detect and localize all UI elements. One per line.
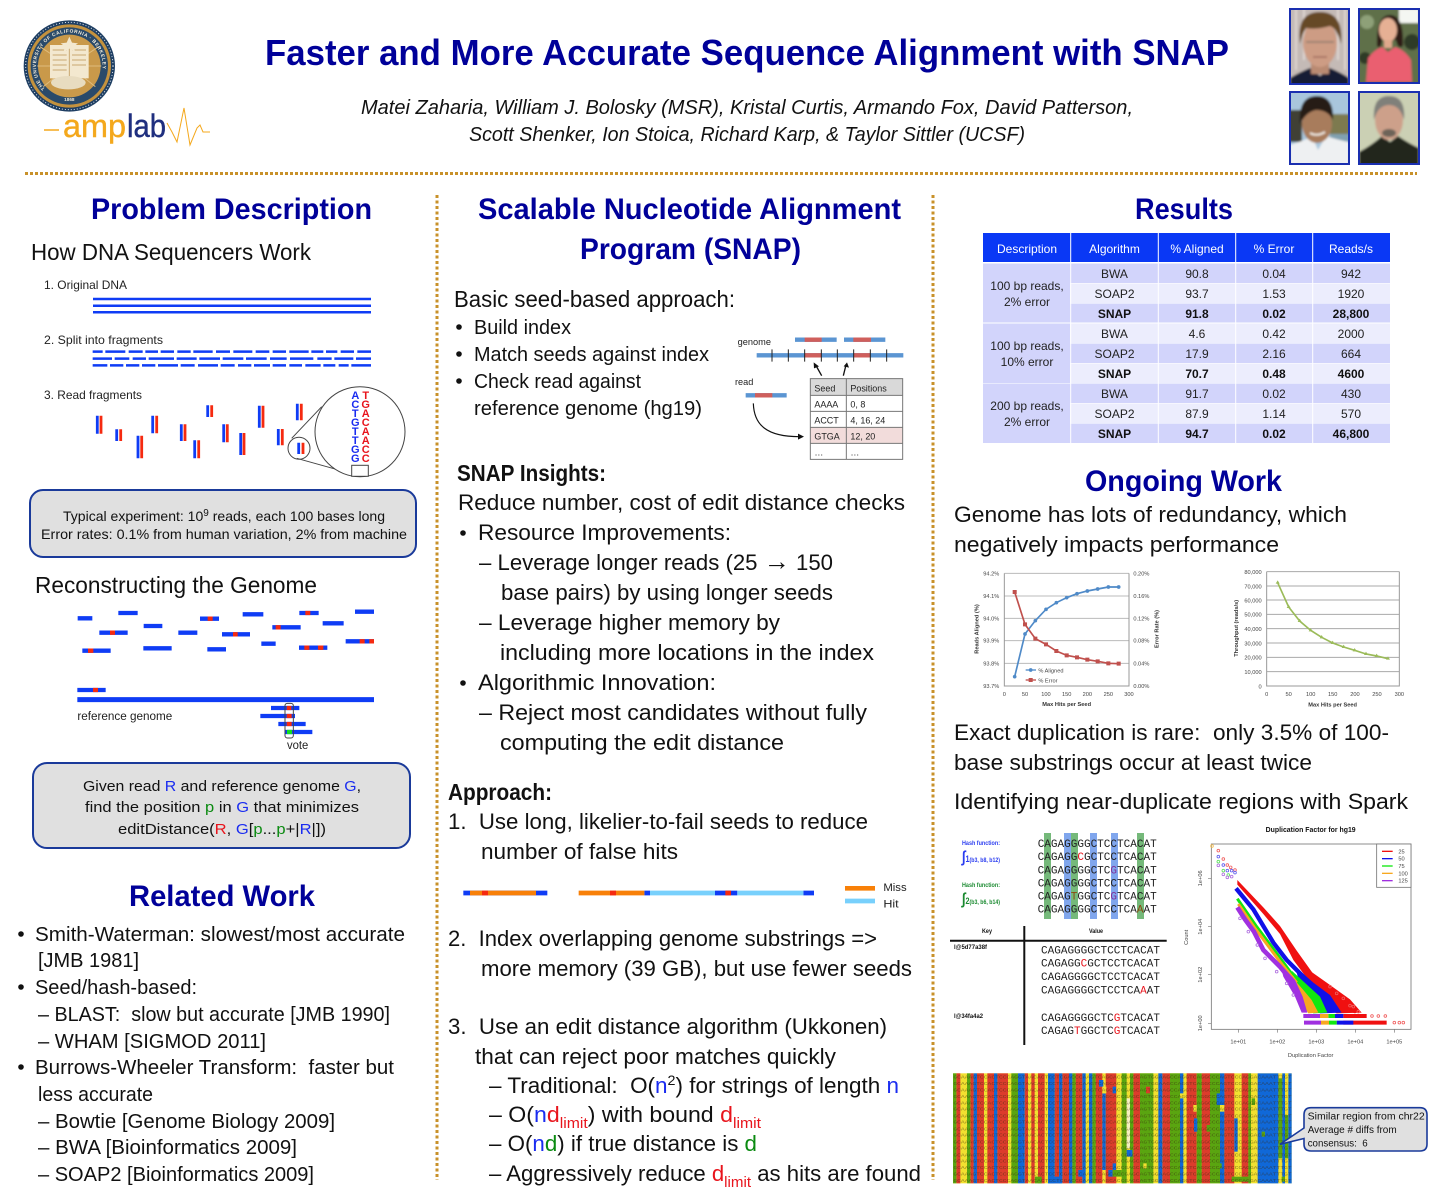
list: related work: – Bowtie [Genome Biology 2009] bbox=[38, 1111, 335, 1133]
legend: duplication factor: 100 bbox=[1398, 871, 1408, 877]
table: key value index: CAGAGTGGCTCGTCACAT bbox=[1041, 1026, 1160, 1038]
diagram: seed index lookup: read bbox=[735, 377, 753, 387]
list: related work: [JMB 1981] bbox=[38, 950, 139, 972]
text: approach step 2: 2. Index overlapping genome substrings => bbox=[448, 926, 877, 951]
chart: throughput vs max hits per seed: 80,000 bbox=[1244, 570, 1262, 576]
table: seed positions: ACCT bbox=[814, 416, 839, 426]
chart: reads aligned and error rate vs max hits per seed: 94.0% bbox=[983, 616, 999, 622]
table: key value index: CAGAGGGGCTCGTCACAT bbox=[1041, 1013, 1160, 1025]
chart: reads aligned and error rate vs max hits per seed: 0.00% bbox=[1133, 684, 1149, 690]
text: redundancy: negatively impacts performance bbox=[954, 532, 1279, 557]
chart: throughput vs max hits per seed: 20,000 bbox=[1244, 656, 1262, 662]
chart: throughput vs max hits per seed: 40,000 bbox=[1244, 627, 1262, 633]
chart: reads aligned and error rate vs max hits per seed: 0 bbox=[1003, 692, 1006, 698]
sequence letters: GCAAAGTCCACTCCCAGGTAACACTCCTCGACCCAAGTCAGCACCGAGCAGTGGAAGCCAGGTCAGGCCCAGTCCCAGGACAAATTTGT bbox=[953, 1120, 1292, 1126]
heading: ongoing work: Ongoing Work bbox=[1085, 465, 1282, 498]
sequence letters: GCAAAGTCCACTCCCAGGTAACACTCCTCGACCCAAGTCAGCACCGAGCAGTGGAAGCCAGGTCAGGCCCAGTCCCAGGACAAATTTGT bbox=[953, 1107, 1292, 1113]
sequence letters: GCAAAGTCCACTCCCAGGTAACACTCCTCGACCCAAGTCAGCACCGAGCAGTGGAAGCCAGGTCAGGCCCAGTCCCAGGACAAATTTGT bbox=[953, 1087, 1292, 1093]
table: results: BWA bbox=[1101, 267, 1128, 281]
text: near-duplicate regions: Identifying near-duplicate regions with Spark bbox=[954, 789, 1409, 814]
sequence letters: GCAAAGTCCACTCCCAGGTAACACTCCTCGACCCAAGTCAGCACCGAGCAGTGGAAGCCAGGTCAGGCCCAGTCCCAGGACAAATTTGT bbox=[953, 1081, 1292, 1087]
diagram: hash functions over aligned sequences: ∫2(b3, b6, b14) bbox=[960, 891, 1000, 908]
text: approach step 3: 3. Use an edit distance algorithm (Ukkonen) bbox=[448, 1014, 887, 1039]
table: results: 942 bbox=[1341, 267, 1361, 281]
text: SNAP insights: including more locations in the index bbox=[500, 640, 874, 665]
text: SNAP insights: Resource Improvements: bbox=[478, 520, 731, 545]
sequence letters: GCAAAGTCCACTCCCAGGTAACACTCCTCGACCCAAGTCAGCACCGAGCAGTGGAAGCCAGGTCAGGCCCAGTCCCAGGACAAATTTGT bbox=[953, 1113, 1292, 1119]
sequence letters: GCAAAGTCCACTCCCAGGTAACACTCCTCGACCCAAGTCAGCACCGAGCAGTGGAAGCCAGGTCAGGCCCAGTCCCAGGACAAATTTGT bbox=[953, 1074, 1292, 1080]
chart: throughput vs max hits per seed: 250 bbox=[1372, 692, 1382, 698]
chart: throughput vs max hits per seed: 150 bbox=[1328, 692, 1337, 698]
panel: problem description bbox=[30, 193, 416, 848]
callout: typical experiment: 9 bbox=[203, 508, 209, 519]
chart: reads aligned and error rate vs max hits per seed: 0.12% bbox=[1133, 616, 1149, 622]
table: results: 664 bbox=[1341, 347, 1361, 361]
text: approach step 3: – Traditional: O(n bbox=[489, 1073, 667, 1098]
table: results: 90.8 bbox=[1185, 267, 1209, 281]
table: results: 4600 bbox=[1338, 367, 1365, 381]
table: results: Description bbox=[997, 242, 1057, 256]
text: SNAP insights: – Leverage higher memory by bbox=[479, 610, 780, 635]
diagram: hash functions over aligned sequences: CAGAGGGGCTCCTCACAT bbox=[1038, 878, 1157, 890]
diagram: hash functions over aligned sequences: CAGAGGGGCTCGTCACAT bbox=[1038, 865, 1157, 877]
chart: duplication factor for hg19: 1e+06 bbox=[1198, 870, 1204, 886]
callout: similar region from chr22 bbox=[1280, 1108, 1427, 1151]
diagram: hash functions over aligned sequences: CAGAGGGGCTCCTCAAAT bbox=[1038, 905, 1157, 917]
chart: reads aligned and error rate vs max hits per seed: 94.1% bbox=[983, 594, 999, 600]
heading: scalable nucleotide alignment program: Scalable Nucleotide Alignment bbox=[478, 193, 901, 226]
text: redundancy: Genome has lots of redundancy, which bbox=[954, 502, 1347, 527]
sequence letters bbox=[953, 1074, 1292, 1184]
chart: reads aligned and error rate vs max hits per seed: 100 bbox=[1041, 692, 1051, 698]
chart: throughput vs max hits per seed: 10,000 bbox=[1244, 670, 1262, 676]
zoom circle with base letters: G bbox=[351, 417, 360, 429]
heading: related work: Related Work bbox=[129, 880, 315, 913]
table: results: 570 bbox=[1341, 407, 1361, 421]
chart: reads aligned and error rate vs max hits per seed: % Aligned bbox=[1038, 668, 1064, 674]
panel: ongoing work bbox=[950, 465, 1427, 1184]
text: SNAP insights: SNAP Insights: bbox=[457, 460, 606, 486]
chart: duplication factor for hg19: 1e+04 bbox=[1198, 919, 1204, 935]
chart: reads aligned and error rate vs max hits per seed: Max Hits per Seed bbox=[1042, 702, 1092, 708]
table: key value index: l@5d77a38f bbox=[954, 945, 988, 951]
chart: throughput vs max hits per seed: 70,000 bbox=[1244, 584, 1262, 590]
table: results: % Aligned bbox=[1170, 242, 1224, 256]
text: approach step 3: n bbox=[886, 1073, 899, 1098]
text: approach step 1: number of false hits bbox=[481, 839, 678, 864]
text: approach step 1: 1. Use long, likelier-to-fail seeds to reduce bbox=[448, 809, 868, 834]
diagram: seed miss and hit bars bbox=[463, 882, 907, 911]
chart: duplication factor for hg19: 1e+02 bbox=[1198, 967, 1204, 983]
diagram: genome reconstruction reads bbox=[77, 612, 374, 752]
text: approach step 3: ) with bound bbox=[588, 1102, 720, 1127]
diagram: hash functions over aligned sequences: Hash function: bbox=[962, 882, 1000, 889]
chart: throughput vs max hits per seed: 200 bbox=[1350, 692, 1360, 698]
sequence letters: GCAAAGTCCACTCCCAGGTAACACTCCTCGACCCAAGTCAGCACCGAGCAGTGGAAGCCAGGTCAGGCCCAGTCCCAGGACAAATTTGT bbox=[953, 1159, 1292, 1165]
text: approach step 3: – O(nd) if true distance is d bbox=[489, 1131, 757, 1156]
sequence letters: GCAAAGTCCACTCCCAGGTAACACTCCTCGACCCAAGTCAGCACCGAGCAGTGGAAGCCAGGTCAGGCCCAGTCCCAGGACAAATTTGT bbox=[953, 1146, 1292, 1152]
table: results: 200 bp reads, bbox=[990, 399, 1064, 413]
text: approach step 3: 2 bbox=[668, 1072, 676, 1088]
table: results: % Error bbox=[1254, 242, 1294, 256]
chart: duplication factor for hg19: 1e+03 bbox=[1308, 1039, 1324, 1045]
table: seed positions: Positions bbox=[850, 384, 887, 394]
legend: duplication factor: 75 bbox=[1398, 864, 1405, 870]
table: results: BWA bbox=[1101, 327, 1128, 341]
table: results: 0.02 bbox=[1262, 307, 1286, 321]
table: results: 0.02 bbox=[1262, 387, 1286, 401]
zoom circle with base letters: A bbox=[362, 435, 370, 447]
sequence letters: GCAAAGTCCACTCCCAGGTAACACTCCTCGACCCAAGTCAGCACCGAGCAGTGGAAGCCAGGTCAGGCCCAGTCCCAGGACAAATTTGT bbox=[953, 1178, 1292, 1184]
zoom circle with base letters: C bbox=[351, 399, 359, 411]
zoom circle with base letters: C bbox=[362, 444, 370, 456]
text: approach step 3: limit bbox=[733, 1115, 762, 1132]
table: seed positions: … bbox=[850, 448, 859, 458]
chart: duplication factor for hg19: 1e+00 bbox=[1198, 1015, 1204, 1031]
text: exact duplication: Exact duplication is rare: only 3.5% of 100- bbox=[954, 720, 1389, 745]
table: results: 87.9 bbox=[1185, 407, 1209, 421]
zoom circle with base letters: T bbox=[352, 426, 359, 438]
label: reference genome: reference genome bbox=[77, 709, 173, 723]
text: SNAP insights bbox=[457, 460, 905, 755]
table: key value index: CAGAGGGGCTCCTCAAAT bbox=[1041, 985, 1160, 997]
table: key value index: CAGAGGGGCTCCTCACAT bbox=[1041, 972, 1160, 984]
table: results: SOAP2 bbox=[1094, 407, 1135, 421]
subheading: how DNA sequencers work: How DNA Sequencers Work bbox=[31, 239, 311, 265]
zoom circle with base letters: T bbox=[362, 390, 369, 402]
text: SNAP insights: – Leverage longer reads (25 → 150 bbox=[479, 546, 833, 576]
chart: reads aligned and error rate vs max hits per seed: 93.7% bbox=[983, 684, 999, 690]
zoom circle with base letters: A bbox=[351, 390, 359, 402]
table: results: 2% error bbox=[1004, 295, 1050, 309]
table: results: 100 bp reads, bbox=[990, 339, 1064, 353]
chart: duplication factor for hg19: 1e+02 bbox=[1269, 1039, 1285, 1045]
table: results: 1920 bbox=[1338, 287, 1365, 301]
zoom circle with base letters: A bbox=[362, 408, 370, 420]
text: basic seed-based approach: Match seeds against index bbox=[474, 344, 709, 366]
zoom circle with base letters: C bbox=[362, 417, 370, 429]
diagram: seed index lookup bbox=[735, 337, 903, 459]
panel: related work bbox=[18, 880, 405, 1186]
chart: throughput vs max hits per seed: 0 bbox=[1265, 692, 1268, 698]
list: related work: – WHAM [SIGMOD 2011] bbox=[38, 1031, 266, 1053]
logo: UC Berkeley seal: 1868 bbox=[64, 97, 75, 102]
chart: duplication factor for hg19: Count bbox=[1184, 929, 1190, 945]
chart: throughput vs max hits per seed: 50 bbox=[1286, 692, 1292, 698]
table: results: SNAP bbox=[1098, 307, 1131, 321]
text: basic seed-based approach: reference genome (hg19) bbox=[474, 398, 702, 420]
table: results: 46,800 bbox=[1333, 427, 1370, 441]
zoom circle with base letters: A bbox=[362, 426, 370, 438]
table: seed positions: AAAA bbox=[814, 400, 838, 410]
chart: throughput vs max hits per seed: 60,000 bbox=[1244, 598, 1262, 604]
sequence letters: GCAAAGTCCACTCCCAGGTAACACTCCTCGACCCAAGTCAGCACCGAGCAGTGGAAGCCAGGTCAGGCCCAGTCCCAGGACAAATTTGT bbox=[953, 1094, 1292, 1100]
table: seed positions: GTGA bbox=[814, 432, 840, 442]
callout: problem statement: editDistance( R, G[p...p+|R|]) bbox=[118, 821, 326, 838]
table: results: 0.02 bbox=[1262, 427, 1286, 441]
logo: UC Berkeley seal: THE UNIVERSITY OF CALIFORNIA · BERKELEY bbox=[32, 29, 106, 91]
table: seed positions: Seed bbox=[814, 384, 835, 394]
text: approach step 3: – O(nd bbox=[489, 1102, 559, 1127]
table: seed positions: … bbox=[814, 448, 823, 458]
text: approach step 1 bbox=[448, 779, 868, 864]
heading: scalable nucleotide alignment program: Program (SNAP) bbox=[580, 233, 801, 266]
panel: SNAP program bbox=[448, 193, 921, 1191]
list: related work: Smith-Waterman: slowest/most accurate bbox=[35, 924, 405, 946]
table: results: Algorithm bbox=[1089, 242, 1140, 256]
chart: reads aligned and error rate vs max hits per seed: 93.8% bbox=[983, 661, 999, 667]
step 3: read fragments bbox=[44, 387, 405, 477]
sequence letters: GCAAAGTCCACTCCCAGGTAACACTCCTCGACCCAAGTCAGCACCGAGCAGTGGAAGCCAGGTCAGGCCCAGTCCCAGGACAAATTTGT bbox=[953, 1165, 1292, 1171]
chart: duplication factor for hg19: Duplication Factor bbox=[1288, 1053, 1334, 1059]
chart: duplication factor for hg19: 1e+05 bbox=[1386, 1039, 1402, 1045]
chart: duplication factor for hg19: Duplication Factor for hg19 bbox=[1266, 827, 1356, 834]
table: results: Reads/s bbox=[1329, 242, 1373, 256]
chart: reads aligned and error rate vs max hits per seed bbox=[975, 571, 1161, 708]
chart: reads aligned and error rate vs max hits per seed: 0.20% bbox=[1133, 571, 1149, 577]
sequence letters: GCAAAGTCCACTCCCAGGTAACACTCCTCGACCCAAGTCAGCACCGAGCAGTGGAAGCCAGGTCAGGCCCAGTCCCAGGACAAATTTGT bbox=[953, 1126, 1292, 1132]
zoom circle with base letters: T bbox=[352, 435, 359, 447]
table: results: 70.7 bbox=[1185, 367, 1209, 381]
title: Faster and More Accurate Sequence Alignment with SNAP bbox=[265, 32, 1229, 73]
chart: throughput vs max hits per seed: Max Hits per Seed bbox=[1308, 703, 1358, 709]
table: key value index: CAGAGGGGCTCCTCACAT bbox=[1041, 945, 1160, 957]
text: SNAP insights: Algorithmic Innovation: bbox=[478, 670, 716, 695]
photo: author 4 bbox=[1357, 90, 1421, 166]
text: exact duplication bbox=[954, 720, 1389, 775]
table: results: 28,800 bbox=[1333, 307, 1370, 321]
step 3: read fragments: 3. Read fragments bbox=[44, 388, 142, 402]
chart: reads aligned and error rate vs max hits per seed: Reads Aligned (%) bbox=[975, 604, 981, 654]
chart: reads aligned and error rate vs max hits per seed: 0.16% bbox=[1133, 594, 1149, 600]
table: key value index bbox=[950, 926, 1167, 1045]
logo: amplab: amp bbox=[63, 108, 126, 144]
legend: hit: Hit bbox=[883, 899, 899, 911]
text: exact duplication: base substrings occur at least twice bbox=[954, 750, 1312, 775]
text: SNAP insights: computing the edit distance bbox=[500, 730, 784, 755]
text: approach step 3: limit bbox=[560, 1115, 589, 1132]
text: approach step 3: ) for strings of length bbox=[676, 1073, 886, 1098]
chart: throughput vs max hits per seed: 0 bbox=[1259, 684, 1262, 690]
chart: duplication factor for hg19: 1e+01 bbox=[1230, 1039, 1246, 1045]
table: results: 430 bbox=[1341, 387, 1361, 401]
chart: reads aligned and error rate vs max hits per seed: 0.08% bbox=[1133, 639, 1149, 645]
table: results: SOAP2 bbox=[1094, 287, 1135, 301]
table: key value index: Key bbox=[982, 929, 993, 935]
diagram: hash functions over aligned sequences: ∫1(b3, b8, b12) bbox=[960, 849, 1000, 866]
zoom circle with base letters: G bbox=[351, 444, 360, 456]
zoom circle with base letters bbox=[315, 387, 405, 477]
table: results: 10% error bbox=[1001, 355, 1053, 369]
list: related work: Burrows-Wheeler Transform: faster but bbox=[35, 1057, 394, 1079]
step 2: split into fragments: 2. Split into fragments bbox=[44, 333, 163, 347]
list: related work: – BWA [Bioinformatics 2009] bbox=[38, 1137, 297, 1159]
authors: Matei Zaharia, William J. Bolosky (MSR), Kristal Curtis, Armando Fox, David Patterson, bbox=[361, 97, 1133, 119]
list: related work bbox=[18, 924, 405, 1186]
heading: scalable nucleotide alignment program bbox=[478, 193, 901, 266]
chart: throughput vs max hits per seed: Throughput (reads/s) bbox=[1234, 600, 1240, 657]
table: results: 2000 bbox=[1338, 327, 1365, 341]
logo: amplab: lab bbox=[127, 108, 166, 144]
table: results: 1.53 bbox=[1262, 287, 1286, 301]
table: seed positions: 0, 8 bbox=[850, 400, 865, 410]
table: key value index: l@34fa4a2 bbox=[954, 1014, 984, 1020]
text: approach step 2 bbox=[448, 926, 912, 981]
table: results: 93.7 bbox=[1185, 287, 1209, 301]
table: results: 0.04 bbox=[1262, 267, 1286, 281]
callout: typical experiment bbox=[30, 490, 416, 557]
chart: throughput vs max hits per seed: 30,000 bbox=[1244, 641, 1262, 647]
legend: duplication factor: 125 bbox=[1398, 879, 1408, 885]
photo: author 1 bbox=[1288, 7, 1351, 86]
text: approach step 3: limit bbox=[724, 1174, 752, 1191]
table: results: SOAP2 bbox=[1094, 347, 1135, 361]
chart: reads aligned and error rate vs max hits per seed: Error Rate (%) bbox=[1155, 610, 1161, 648]
chart: reads aligned and error rate vs max hits per seed: 94.2% bbox=[983, 571, 999, 577]
legend: miss: Miss bbox=[883, 882, 907, 894]
table: results: 2% error bbox=[1004, 415, 1050, 429]
callout: problem statement: Given read R and reference genome G, bbox=[83, 778, 361, 795]
zoom circle with base letters: T bbox=[352, 408, 359, 420]
list: related work: Seed/hash-based: bbox=[35, 977, 197, 999]
legend: duplication factor: 25 bbox=[1398, 849, 1405, 855]
sequence letters: GCAAAGTCCACTCCCAGGTAACACTCCTCGACCCAAGTCAGCACCGAGCAGTGGAAGCCAGGTCAGGCCCAGTCCCAGGACAAATTTGT bbox=[953, 1139, 1292, 1145]
text: basic seed-based approach: Check read against bbox=[474, 371, 641, 393]
table: results: SNAP bbox=[1098, 367, 1131, 381]
chart: reads aligned and error rate vs max hits per seed: 250 bbox=[1104, 692, 1113, 698]
table: results: BWA bbox=[1101, 387, 1128, 401]
zoom circle with base letters: C bbox=[362, 453, 370, 465]
table: results: 2.16 bbox=[1262, 347, 1286, 361]
chart: reads aligned and error rate vs max hits per seed: 200 bbox=[1083, 692, 1092, 698]
callout: problem statement bbox=[33, 763, 410, 848]
table: results: 0.48 bbox=[1262, 367, 1286, 381]
table: results: 0.42 bbox=[1262, 327, 1286, 341]
text: SNAP insights: base pairs) by using longer seeds bbox=[501, 580, 833, 605]
text: basic seed-based approach bbox=[454, 286, 735, 420]
text: basic seed-based approach: Basic seed-based approach: bbox=[454, 286, 735, 312]
diagram: seed index lookup: genome bbox=[738, 337, 771, 347]
zoom circle with base letters: G bbox=[361, 399, 370, 411]
chart: reads aligned and error rate vs max hits per seed: 50 bbox=[1022, 692, 1028, 698]
table: key value index: CAGAGGCGCTCCTCACAT bbox=[1041, 959, 1160, 971]
authors bbox=[361, 97, 1133, 146]
callout: similar region from chr22: Similar region from chr22 bbox=[1308, 1112, 1425, 1122]
list: related work: – SOAP2 [Bioinformatics 2009] bbox=[38, 1164, 314, 1186]
diagram: hash functions over aligned sequences: CAGAGTGGCTCGTCACAT bbox=[1038, 892, 1157, 904]
table: results: SNAP bbox=[1098, 427, 1131, 441]
table: results: 1.14 bbox=[1262, 407, 1286, 421]
diagram: hash functions over aligned sequences: CAGAGGCGCTCCTCACAT bbox=[1038, 852, 1157, 864]
text: approach step 2: more memory (39 GB), but use fewer seeds bbox=[481, 956, 912, 981]
logo: UC Berkeley seal bbox=[24, 20, 115, 112]
chart: reads aligned and error rate vs max hits per seed: 150 bbox=[1062, 692, 1071, 698]
table: key value index: Value bbox=[1089, 929, 1104, 935]
table: results: 4.6 bbox=[1189, 327, 1206, 341]
chart: throughput vs max hits per seed: 50,000 bbox=[1244, 613, 1262, 619]
text: approach step 3 bbox=[448, 1014, 921, 1191]
chart: throughput vs max hits per seed: 100 bbox=[1306, 692, 1315, 698]
chart: duplication factor for hg19: 1e+04 bbox=[1347, 1039, 1363, 1045]
callout: typical experiment: Typical experiment: 10 bbox=[63, 508, 203, 524]
photo: author 2 bbox=[1357, 7, 1421, 85]
callout: problem statement: find the position p in G that minimizes bbox=[85, 799, 359, 816]
table: seed positions bbox=[810, 379, 903, 459]
chart: reads aligned and error rate vs max hits per seed: 300 bbox=[1124, 692, 1134, 698]
sequence letters: GCAAAGTCCACTCCCAGGTAACACTCCTCGACCCAAGTCAGCACCGAGCAGTGGAAGCCAGGTCAGGCCCAGTCCCAGGACAAATTTGT bbox=[953, 1172, 1292, 1178]
panel: results bbox=[983, 193, 1390, 443]
step 1: original DNA: 1. Original DNA bbox=[44, 278, 127, 292]
text: approach step 1: Approach: bbox=[448, 779, 552, 805]
diagram: hash functions over aligned sequences: CAGAGGGGCTCCTCACAT bbox=[1038, 839, 1157, 851]
callout: typical experiment: reads, each 100 bases long bbox=[209, 508, 385, 524]
text: approach step 3: d bbox=[720, 1102, 733, 1127]
text: basic seed-based approach: Build index bbox=[474, 317, 571, 339]
label: vote: vote bbox=[287, 738, 309, 752]
photo: author 3 bbox=[1288, 90, 1351, 166]
diagram: hash functions over aligned sequences bbox=[950, 833, 1167, 1045]
chart: reads aligned and error rate vs max hits per seed: 0.04% bbox=[1133, 661, 1149, 667]
heading: problem description: Problem Description bbox=[91, 193, 372, 226]
text: approach step 3: as hits are found bbox=[751, 1161, 921, 1186]
table: results: 94.7 bbox=[1185, 427, 1209, 441]
table: seed positions: 12, 20 bbox=[850, 432, 875, 442]
zoom circle with base letters: G bbox=[351, 453, 360, 465]
chart: reads aligned and error rate vs max hits per seed: % Error bbox=[1038, 678, 1058, 684]
table: results bbox=[983, 233, 1390, 443]
table: results: 17.9 bbox=[1185, 347, 1209, 361]
chart: reads aligned and error rate vs max hits per seed: 93.9% bbox=[983, 639, 999, 645]
list: related work: less accurate bbox=[38, 1084, 153, 1106]
callout: typical experiment: Error rates: 0.1% from human variation, 2% from machine bbox=[41, 526, 407, 542]
heading: results: Results bbox=[1135, 193, 1233, 226]
table: results: 91.8 bbox=[1185, 307, 1209, 321]
table: seed positions: 4, 16, 24 bbox=[850, 416, 885, 426]
step 1: original DNA bbox=[44, 278, 371, 312]
authors: Scott Shenker, Ion Stoica, Richard Karp, & Taylor Sittler (UCSF) bbox=[469, 124, 1025, 146]
text: approach step 3: that can reject poor matches quickly bbox=[475, 1044, 836, 1069]
sequence letters: GCAAAGTCCACTCCCAGGTAACACTCCTCGACCCAAGTCAGCACCGAGCAGTGGAAGCCAGGTCAGGCCCAGTCCCAGGACAAATTTGT bbox=[953, 1100, 1292, 1106]
image: multiple sequence alignment bbox=[953, 1073, 1292, 1184]
logo: amplab bbox=[44, 108, 210, 145]
chart: throughput vs max hits per seed: 300 bbox=[1395, 692, 1404, 698]
diagram: hash functions over aligned sequences: Hash function: bbox=[962, 840, 1000, 847]
callout: similar region from chr22: consensus: 6 bbox=[1308, 1138, 1368, 1150]
text: approach step 3: – Aggressively reduce d bbox=[489, 1161, 724, 1186]
list: related work: – BLAST: slow but accurate [JMB 1990] bbox=[38, 1004, 390, 1026]
text: SNAP insights: – Reject most candidates without fully bbox=[479, 700, 867, 725]
legend: duplication factor: 50 bbox=[1398, 857, 1405, 863]
sequence letters: GCAAAGTCCACTCCCAGGTAACACTCCTCGACCCAAGTCAGCACCGAGCAGTGGAAGCCAGGTCAGGCCCAGTCCCAGGACAAATTTGT bbox=[953, 1152, 1292, 1158]
chart: duplication factor for hg19 bbox=[1184, 827, 1411, 1059]
legend: duplication factor bbox=[1377, 844, 1411, 887]
sequence letters: GCAAAGTCCACTCCCAGGTAACACTCCTCGACCCAAGTCAGCACCGAGCAGTGGAAGCCAGGTCAGGCCCAGTCCCAGGACAAATTTGT bbox=[953, 1133, 1292, 1139]
subheading: reconstructing the genome: Reconstructing the Genome bbox=[35, 572, 317, 598]
table: results: 91.7 bbox=[1185, 387, 1209, 401]
text: redundancy bbox=[954, 502, 1347, 557]
text: SNAP insights: Reduce number, cost of edit distance checks bbox=[458, 490, 905, 515]
chart: throughput vs max hits per seed bbox=[1234, 570, 1404, 709]
callout: similar region from chr22: Average # diffs from bbox=[1308, 1125, 1397, 1136]
table: results: 100 bp reads, bbox=[990, 279, 1064, 293]
